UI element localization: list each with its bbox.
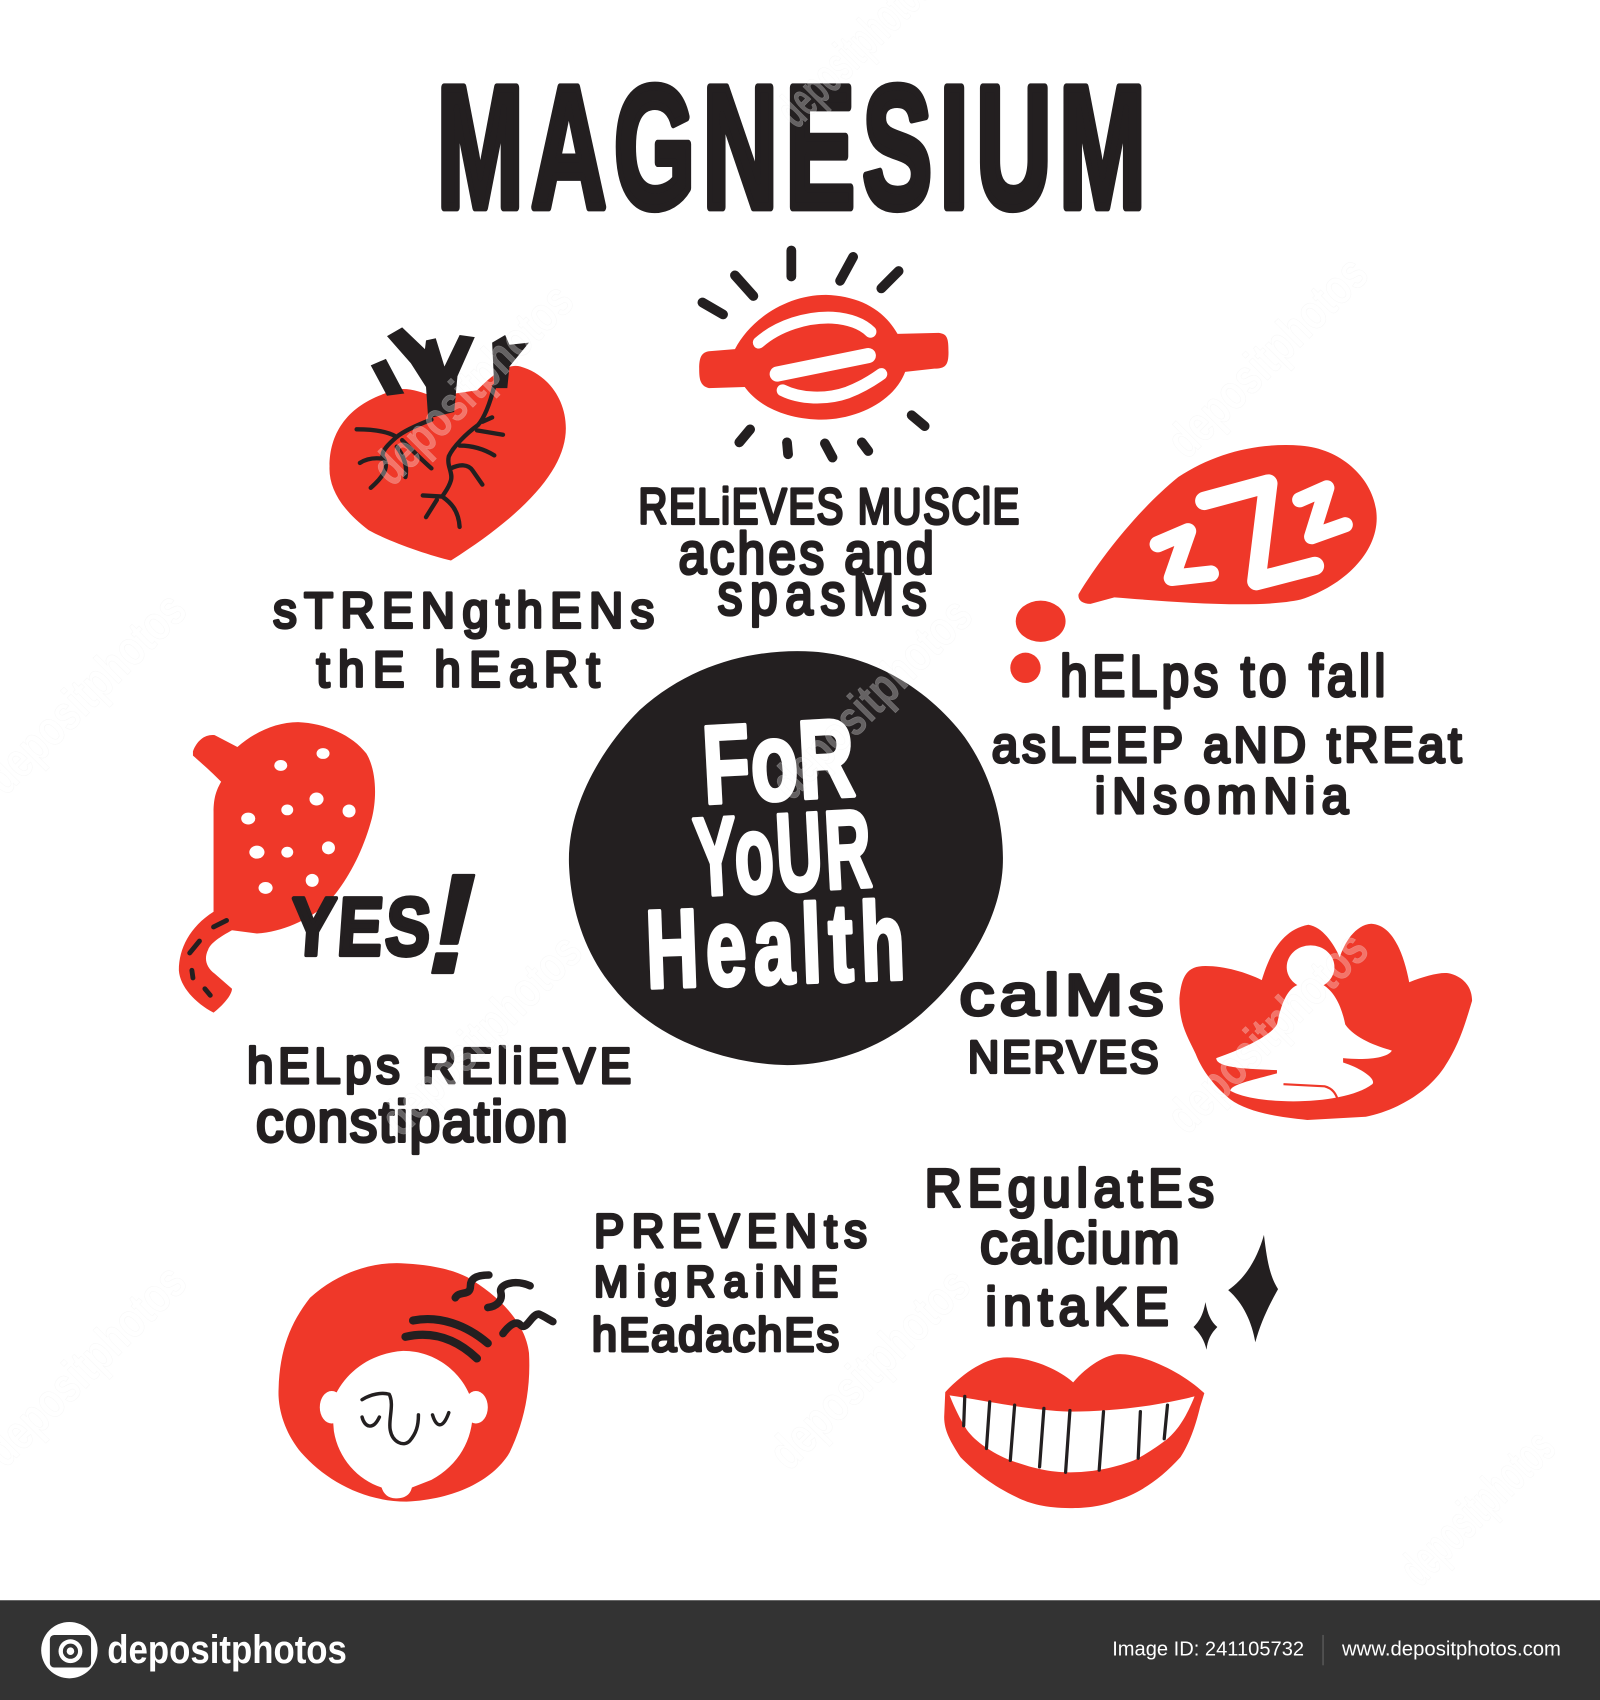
- panel: digestion: [179, 722, 631, 1155]
- icon: stomach: [179, 722, 375, 1013]
- panel: heart: [273, 327, 654, 698]
- watermarks: depositphotos: [760, 586, 983, 810]
- watermarks: depositphotos: [361, 272, 584, 496]
- label: helps to fall asleep and treat insomnia: [992, 643, 1462, 824]
- watermarks: depositphotos: [1155, 245, 1379, 469]
- label: helps to fall asleep and treat insomnia: asLEEP aND tREat: [992, 718, 1462, 773]
- label: helps to fall asleep and treat insomnia: hELps to fall: [1060, 643, 1385, 709]
- title: MAGNESIUM: [437, 52, 1146, 245]
- icon: smiling mouth: [944, 1354, 1204, 1508]
- panel: migraine: [278, 1204, 867, 1502]
- icon: sparkles: [1193, 1235, 1278, 1350]
- brand name: depositphotos: [107, 1628, 347, 1672]
- label: exclamation mark: !: [413, 846, 493, 1003]
- black blob: [569, 651, 1003, 1065]
- label: relieves muscle aches and spasms: RELiEVES MUSClE: [638, 478, 1019, 535]
- icon: muscle with rays: [699, 250, 949, 458]
- label: relieves muscle aches and spasms: [638, 478, 1019, 628]
- label: helps to fall asleep and treat insomnia: iNsomNia: [1095, 769, 1349, 824]
- label: prevents migraine headaches: PREVENts: [594, 1204, 867, 1257]
- heading: for your health: Health: [644, 878, 907, 1011]
- icon: meditating figure on lotus: [1179, 924, 1472, 1120]
- panel: nerves: [959, 924, 1472, 1120]
- footer bar: [0, 1600, 1600, 1700]
- label: yes: YES: [287, 881, 434, 973]
- heading: for your health: YoUR: [691, 787, 874, 920]
- image id: Image ID: 241105732: [1112, 1639, 1304, 1661]
- panel: calcium: [925, 1159, 1278, 1508]
- website: www.depositphotos.com: [1341, 1639, 1561, 1661]
- icon: heart: [329, 327, 566, 561]
- label: calms nerves: NERVES: [968, 1032, 1159, 1083]
- panel: muscle: [638, 250, 1019, 628]
- label: prevents migraine headaches: hEadachEs: [592, 1308, 839, 1361]
- label: relieves muscle aches and spasms: aches and: [679, 521, 934, 586]
- label: helps relieve constipation: [247, 1039, 631, 1155]
- label: strengthens the heart: [273, 584, 654, 698]
- watermarks: depositphotos: [1155, 920, 1379, 1144]
- label: calms nerves: calMs: [959, 961, 1164, 1027]
- icon: sleep thought bubble: [1010, 445, 1377, 683]
- label: relieves muscle aches and spasms: spasMs: [718, 562, 927, 628]
- heading: for your health: [644, 697, 907, 1011]
- label: helps relieve constipation: constipation: [256, 1089, 568, 1155]
- label: calms nerves: [959, 961, 1164, 1083]
- label: regulates calcium intake: REgulatEs: [925, 1159, 1214, 1219]
- label: prevents migraine headaches: MigRaiNE: [594, 1258, 838, 1306]
- icon: depositphotos logo: [41, 1622, 98, 1678]
- label: helps relieve constipation: hELps REliEVE: [247, 1039, 631, 1094]
- label: regulates calcium intake: intaKE: [985, 1277, 1169, 1337]
- panel: center blob: [569, 651, 1003, 1065]
- watermarks: depositphotos: [369, 923, 593, 1146]
- label: strengthens the heart: thE hEaRt: [317, 642, 600, 698]
- icon: head with migraine: [278, 1263, 553, 1502]
- label: regulates calcium intake: calcium: [980, 1211, 1180, 1276]
- watermarks: depositphotos: [757, 1257, 981, 1480]
- panel: sleep: [992, 445, 1462, 824]
- heading: for your health: FoR: [699, 697, 857, 828]
- label: strengthens the heart: sTRENgthENs: [273, 584, 654, 639]
- label: regulates calcium intake: [925, 1159, 1214, 1337]
- label: prevents migraine headaches: [592, 1204, 867, 1361]
